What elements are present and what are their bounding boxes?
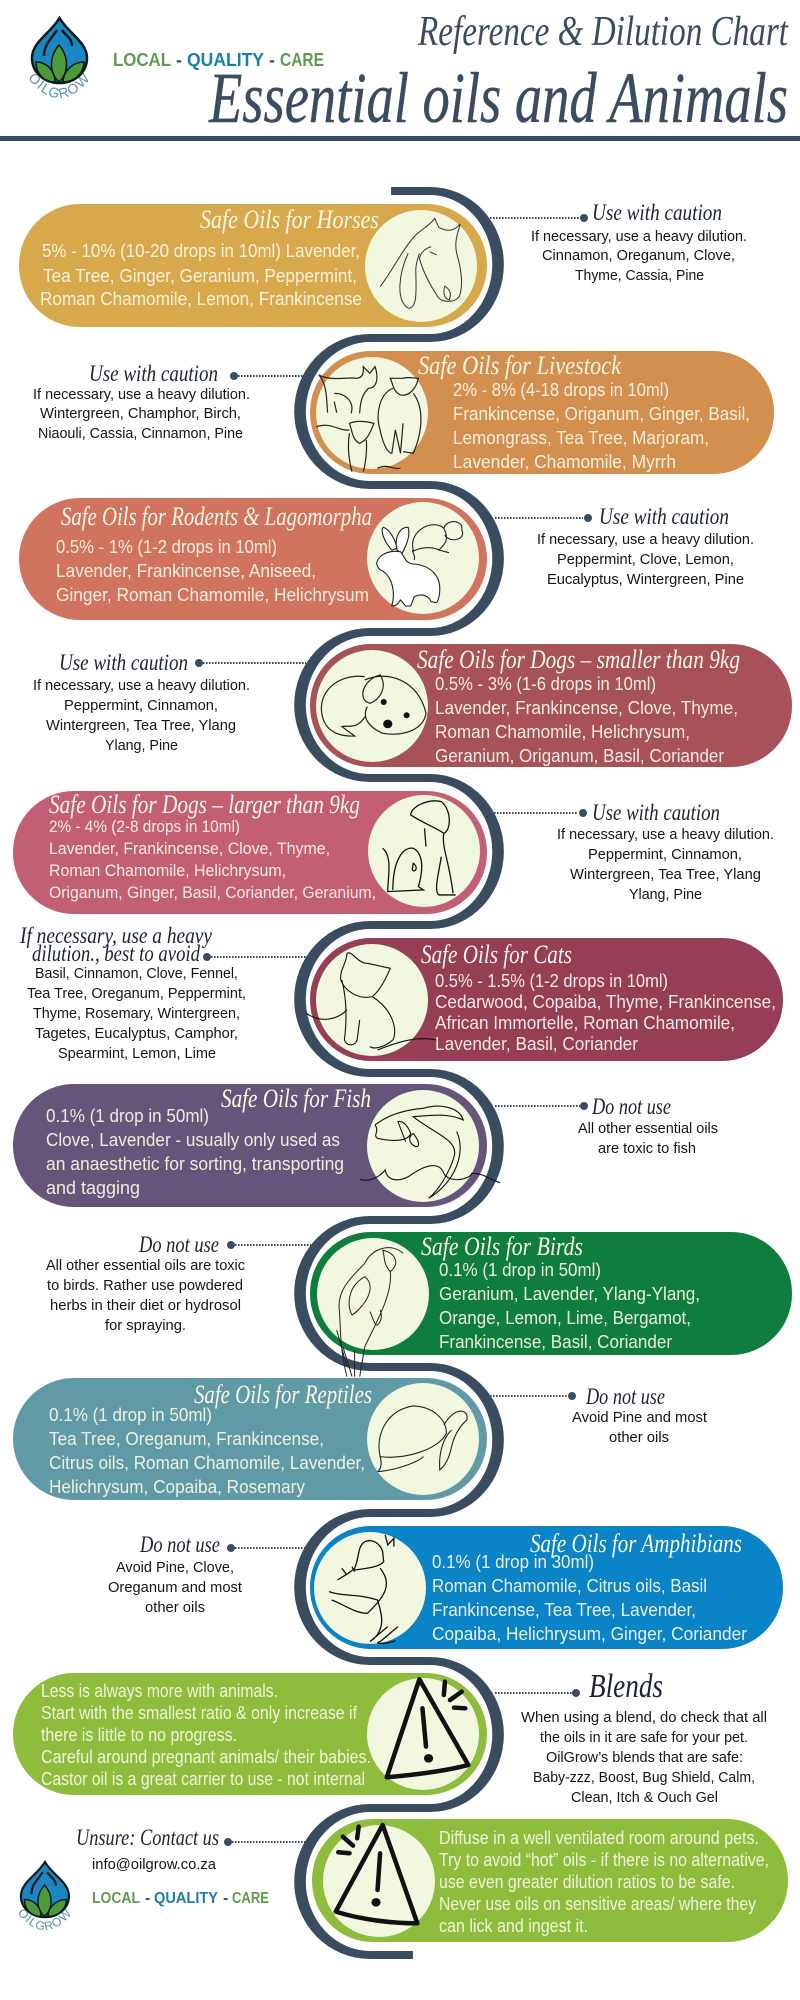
callout: horses caution bbox=[490, 200, 747, 284]
callout: blends: Clean, Itch & Ouch Gel bbox=[571, 1789, 718, 1806]
callout: blends: Blends bbox=[589, 1668, 663, 1705]
callout: cats avoid: Thyme, Rosemary, Wintergreen, bbox=[33, 1005, 240, 1022]
callout: horses caution: Thyme, Cassia, Pine bbox=[575, 267, 704, 284]
text: there is little to no progress. bbox=[41, 1725, 237, 1745]
panel: horses bbox=[19, 204, 487, 327]
text: Frankincense, Basil, Coriander bbox=[439, 1332, 672, 1352]
text: Orange, Lemon, Lime, Bergamot, bbox=[439, 1308, 691, 1328]
callout: rodents caution: Peppermint, Clove, Lemon, bbox=[557, 551, 734, 568]
icon: fish bbox=[360, 1090, 500, 1202]
callout: blends: Baby-zzz, Boost, Bug Shield, Calm, bbox=[533, 1769, 755, 1786]
panel: general warning bbox=[13, 1673, 487, 1795]
tagline: - bbox=[176, 50, 182, 70]
icon: sitting dog bbox=[368, 795, 480, 907]
callout: reptiles do not use bbox=[490, 1384, 708, 1446]
text: 0.1% (1 drop in 50ml) bbox=[439, 1260, 601, 1280]
icon: puppy bbox=[316, 650, 428, 762]
callout: fish do not use: All other essential oils bbox=[578, 1120, 718, 1137]
callout: horses caution: Cinnamon, Oreganum, Clove, bbox=[542, 247, 735, 264]
tagline: CARE bbox=[280, 50, 324, 70]
panel: small dogs bbox=[310, 644, 792, 767]
text: Frankincense, Origanum, Ginger, Basil, bbox=[453, 404, 750, 424]
callout: large dogs caution: Ylang, Pine bbox=[629, 886, 702, 903]
pill bbox=[310, 644, 792, 767]
text: Lemongrass, Tea Tree, Marjoram, bbox=[453, 428, 709, 448]
text bbox=[439, 1828, 769, 1936]
text: 0.5% - 1% (1-2 drops in 10ml) bbox=[56, 537, 277, 557]
panel: reptiles bbox=[13, 1378, 487, 1500]
callout: small dogs caution: Use with caution bbox=[59, 650, 188, 675]
text bbox=[432, 1552, 747, 1644]
text: use even greater dilution ratios to be safe. bbox=[439, 1872, 735, 1892]
text bbox=[40, 241, 362, 309]
footer logo bbox=[19, 1860, 70, 1930]
callout: large dogs caution: If necessary, use a heavy dilution. bbox=[557, 826, 774, 843]
callout: amphibians do not use: Do not use bbox=[139, 1532, 220, 1557]
text: Frankincense, Tea Tree, Lavender, bbox=[432, 1600, 696, 1620]
title: Safe Oils for Fish bbox=[221, 1084, 371, 1113]
text bbox=[439, 1260, 700, 1352]
callout: birds do not use: All other essential oils are toxic bbox=[46, 1257, 245, 1274]
panel: large dogs bbox=[13, 790, 487, 914]
icon: frog bbox=[314, 1532, 426, 1644]
title: Safe Oils for Livestock bbox=[418, 351, 621, 380]
callout: birds do not use: herbs in their diet or hydrosol bbox=[50, 1297, 241, 1314]
callout: livestock caution: Niaouli, Cassia, Cinnamon, Pine bbox=[38, 425, 243, 442]
callout: reptiles do not use: Do not use bbox=[585, 1384, 665, 1409]
callout: rodents caution: Use with caution bbox=[599, 504, 729, 529]
callout: horses caution: Use with caution bbox=[592, 200, 722, 225]
callout: livestock caution bbox=[33, 361, 304, 442]
icon: livestock bbox=[316, 357, 428, 472]
text: 2% - 4% (2-8 drops in 10ml) bbox=[49, 817, 240, 836]
callout: cats avoid: Basil, Cinnamon, Clove, Fennel, bbox=[35, 965, 238, 982]
callout: cats avoid: If necessary, use a heavy bbox=[19, 923, 213, 948]
text: Geranium, Lavender, Ylang-Ylang, bbox=[439, 1284, 700, 1304]
panel: amphibians bbox=[310, 1526, 783, 1649]
callout: amphibians do not use: Avoid Pine, Clove, bbox=[116, 1559, 234, 1576]
panel: diffuse warning bbox=[312, 1819, 788, 1942]
callout: fish do not use bbox=[495, 1094, 718, 1157]
pill bbox=[310, 938, 783, 1061]
text: Lavender, Frankincense, Clove, Thyme, bbox=[435, 698, 738, 718]
text: Never use oils on sensitive areas/ where they bbox=[439, 1894, 756, 1914]
callout: cats avoid: dilution., best to avoid bbox=[32, 941, 200, 966]
callout: cats avoid: Tea Tree, Oreganum, Peppermint, bbox=[27, 985, 246, 1002]
text: 0.1% (1 drop in 30ml) bbox=[432, 1552, 594, 1572]
callout: cats avoid bbox=[19, 923, 306, 1062]
callout: large dogs caution: Use with caution bbox=[592, 800, 720, 825]
callout: amphibians do not use: other oils bbox=[145, 1599, 205, 1616]
callout: reptiles do not use: Avoid Pine and most bbox=[572, 1409, 708, 1426]
text: Roman Chamomile, Helichrysum, bbox=[49, 861, 286, 880]
text: Lavender, Chamomile, Myrrh bbox=[453, 452, 676, 472]
pill bbox=[19, 498, 487, 620]
text: 0.5% - 3% (1-6 drops in 10ml) bbox=[435, 674, 656, 694]
title: Safe Oils for Rodents & Lagomorpha bbox=[61, 502, 372, 531]
header bbox=[0, 9, 800, 141]
callout: blends: When using a blend, do check that all bbox=[521, 1709, 767, 1726]
callout: livestock caution: Use with caution bbox=[89, 361, 218, 386]
callout: large dogs caution: Wintergreen, Tea Tree, Ylang bbox=[570, 866, 761, 883]
text bbox=[56, 537, 369, 605]
pill bbox=[13, 1378, 487, 1500]
callout: horses caution: If necessary, use a heavy dilution. bbox=[531, 228, 747, 245]
callout: contact bbox=[76, 1825, 306, 1873]
callout: rodents caution bbox=[495, 504, 754, 588]
text: Ginger, Roman Chamomile, Helichrysum bbox=[56, 585, 369, 605]
callout: cats avoid: Spearmint, Lemon, Lime bbox=[58, 1045, 216, 1062]
callout: blends: the oils in it are safe for your pet. bbox=[540, 1729, 748, 1746]
text: Geranium, Origanum, Basil, Coriander bbox=[435, 746, 724, 766]
callout: large dogs caution bbox=[494, 800, 774, 903]
title: Safe Oils for Dogs – smaller than 9kg bbox=[417, 645, 740, 674]
text: and tagging bbox=[46, 1178, 140, 1198]
text: 5% - 10% (10-20 drops in 10ml) Lavender, bbox=[42, 241, 360, 261]
callout: small dogs caution: If necessary, use a heavy dilution. bbox=[33, 677, 250, 694]
callout: cats avoid: Tagetes, Eucalyptus, Camphor, bbox=[35, 1025, 238, 1042]
text: Copaiba, Helichrysum, Ginger, Coriander bbox=[432, 1624, 747, 1644]
text: Roman Chamomile, Citrus oils, Basil bbox=[432, 1576, 707, 1596]
header rule bbox=[0, 136, 800, 141]
pill bbox=[310, 351, 774, 474]
callout: small dogs caution: Ylang, Pine bbox=[105, 737, 178, 754]
text: Helichrysum, Copaiba, Rosemary bbox=[49, 1477, 305, 1497]
text bbox=[435, 971, 776, 1054]
text: Clove, Lavender - usually only used as bbox=[46, 1130, 340, 1150]
text: Careful around pregnant animals/ their babies. bbox=[41, 1747, 371, 1767]
icon: horse bbox=[365, 210, 477, 322]
text: Lavender, Basil, Coriander bbox=[435, 1034, 638, 1054]
callout: small dogs caution: Wintergreen, Tea Tree, Ylang bbox=[46, 717, 236, 734]
callout: birds do not use: for spraying. bbox=[105, 1317, 186, 1334]
panel: fish bbox=[13, 1084, 500, 1207]
footer tagline: - bbox=[223, 1890, 228, 1907]
text: Castor oil is a great carrier to use - not internal bbox=[41, 1769, 365, 1789]
panel: birds bbox=[310, 1232, 792, 1377]
text: 0.5% - 1.5% (1-2 drops in 10ml) bbox=[435, 971, 668, 991]
callout: amphibians do not use bbox=[108, 1532, 306, 1616]
footer tagline: QUALITY bbox=[154, 1890, 218, 1907]
callout: livestock caution: If necessary, use a heavy dilution. bbox=[33, 386, 250, 403]
icon: turtle bbox=[367, 1383, 479, 1495]
text: Lavender, Frankincense, Clove, Thyme, bbox=[49, 839, 330, 858]
callout: blends: OilGrow’s blends that are safe: bbox=[546, 1749, 743, 1766]
callout: livestock caution: Wintergreen, Champhor, Birch, bbox=[40, 405, 241, 422]
text bbox=[46, 1106, 344, 1198]
icon: rabbit and mouse bbox=[367, 502, 479, 614]
footer tagline bbox=[92, 1890, 269, 1907]
text: Roman Chamomile, Lemon, Frankincense bbox=[40, 289, 362, 309]
tagline bbox=[113, 50, 324, 70]
callout: contact: info@oilgrow.co.za bbox=[92, 1856, 217, 1873]
callout: contact: Unsure: Contact us bbox=[76, 1825, 219, 1850]
text: Lavender, Frankincense, Aniseed, bbox=[56, 561, 316, 581]
serpentine connector bbox=[300, 191, 498, 1955]
pill bbox=[19, 204, 487, 327]
title: Safe Oils for Birds bbox=[421, 1232, 583, 1261]
title: Safe Oils for Reptiles bbox=[194, 1380, 372, 1409]
text bbox=[453, 380, 750, 472]
text: Tea Tree, Oreganum, Frankincense, bbox=[49, 1429, 324, 1449]
callout: reptiles do not use: other oils bbox=[609, 1429, 669, 1446]
text: can lick and ingest it. bbox=[439, 1916, 588, 1936]
icon: warning triangle bbox=[323, 1825, 435, 1937]
pill bbox=[13, 791, 487, 914]
footer tagline: - bbox=[145, 1890, 150, 1907]
callout: fish do not use: are toxic to fish bbox=[598, 1140, 696, 1157]
text: Origanum, Ginger, Basil, Coriander, Geranium, bbox=[49, 883, 376, 902]
callout: large dogs caution: Peppermint, Cinnamon, bbox=[588, 846, 742, 863]
text: African Immortelle, Roman Chamomile, bbox=[435, 1013, 735, 1033]
title: Safe Oils for Amphibians bbox=[530, 1529, 742, 1558]
pill bbox=[13, 1673, 487, 1795]
text: 2% - 8% (4-18 drops in 10ml) bbox=[453, 380, 669, 400]
callout: fish do not use: Do not use bbox=[591, 1094, 671, 1119]
tagline: - bbox=[269, 50, 275, 70]
tagline: LOCAL bbox=[113, 50, 171, 70]
text: Tea Tree, Ginger, Geranium, Peppermint, bbox=[43, 266, 357, 286]
callout: birds do not use bbox=[46, 1232, 311, 1334]
footer tagline: LOCAL bbox=[92, 1890, 140, 1907]
text: Start with the smallest ratio & only increase if bbox=[41, 1703, 358, 1723]
footer tagline: CARE bbox=[232, 1890, 269, 1907]
callout: blends bbox=[495, 1668, 767, 1806]
text: 0.1% (1 drop in 50ml) bbox=[49, 1405, 212, 1425]
pill bbox=[310, 1232, 792, 1355]
logo: oil drop with leaves: OILGROW bbox=[30, 72, 88, 98]
text bbox=[41, 1681, 371, 1789]
title: Safe Oils for Dogs – larger than 9kg bbox=[49, 790, 360, 819]
text: Citrus oils, Roman Chamomile, Lavender, bbox=[49, 1453, 365, 1473]
pill bbox=[310, 1526, 783, 1649]
footer logo: OILGROW bbox=[19, 1908, 70, 1930]
icon: warning triangle bbox=[367, 1678, 479, 1790]
callout: rodents caution: Eucalyptus, Wintergreen, Pine bbox=[547, 571, 744, 588]
icon: parrot bbox=[317, 1238, 429, 1377]
pill bbox=[312, 1819, 788, 1942]
text: Roman Chamomile, Helichrysum, bbox=[435, 722, 690, 742]
callout: rodents caution: If necessary, use a heavy dilution. bbox=[537, 531, 754, 548]
title: Safe Oils for Horses bbox=[200, 205, 379, 234]
callout: birds do not use: Do not use bbox=[138, 1232, 219, 1257]
text bbox=[49, 817, 376, 902]
text: Diffuse in a well ventilated room around pets. bbox=[439, 1828, 759, 1848]
text bbox=[435, 674, 738, 766]
logo: oil drop with leaves bbox=[30, 16, 88, 98]
title: Safe Oils for Cats bbox=[421, 940, 572, 969]
callout: amphibians do not use: Oreganum and most bbox=[108, 1579, 243, 1596]
panel: cats bbox=[306, 938, 783, 1061]
panel: livestock bbox=[310, 351, 774, 474]
text: Less is always more with animals. bbox=[41, 1681, 278, 1701]
icon: cat bbox=[306, 944, 436, 1056]
callout: small dogs caution: Peppermint, Cinnamon, bbox=[64, 697, 218, 714]
tagline: QUALITY bbox=[187, 50, 264, 70]
text: Cedarwood, Copaiba, Thyme, Frankincense, bbox=[435, 992, 776, 1012]
callout: birds do not use: to birds. Rather use powdered bbox=[47, 1277, 243, 1294]
text: an anaesthetic for sorting, transporting bbox=[46, 1154, 344, 1174]
text bbox=[49, 1405, 365, 1497]
pill bbox=[13, 1084, 487, 1207]
callout: small dogs caution bbox=[33, 650, 306, 754]
text: 0.1% (1 drop in 50ml) bbox=[46, 1106, 209, 1126]
panel: rodents and lagomorpha bbox=[19, 498, 487, 620]
